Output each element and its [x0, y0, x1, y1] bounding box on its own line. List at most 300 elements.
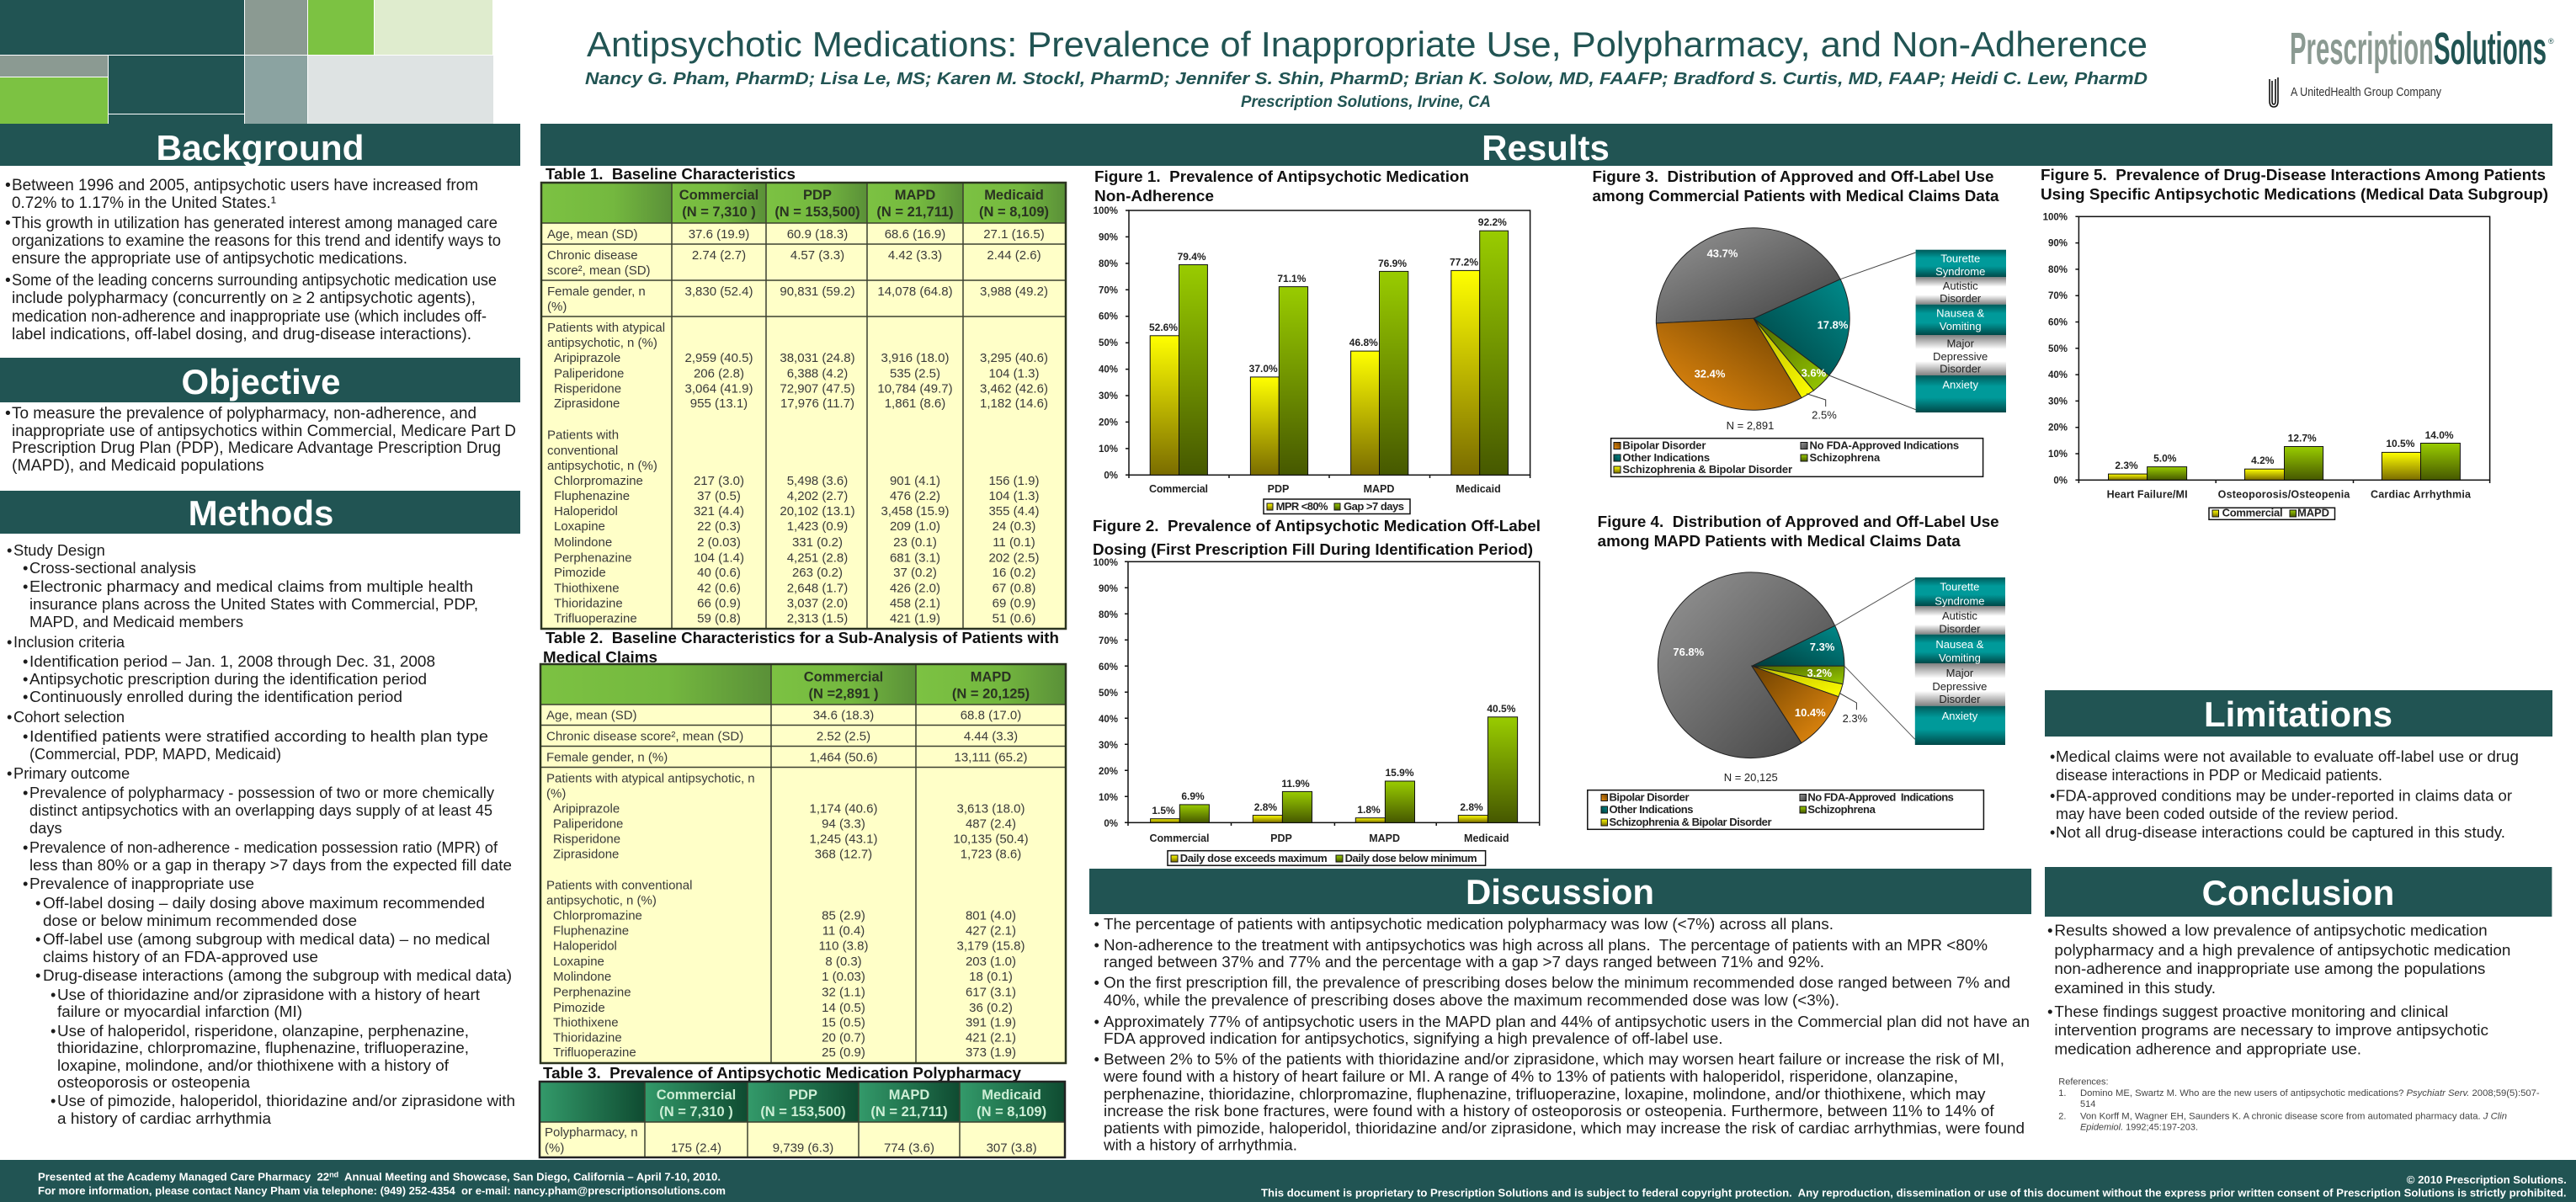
table 2 MAPD column: 421 (2.1): [966, 1031, 1016, 1045]
table 1 title: Table 1. Baseline Characteristics: [546, 165, 796, 183]
text block: discussion: increase the risk bone fractures, were found with a history of osteoporosis or osteopenia. Furthermore, between 11% to 14% of: [1104, 1102, 1995, 1120]
figure 1 title: [1094, 168, 1469, 205]
text block: methods: •: [51, 1092, 56, 1109]
table 1 PDP column: 4,202 (2.7): [787, 489, 848, 503]
text block: limitations: Medical claims were not available to evaluate off-label use or drug: [2056, 748, 2519, 765]
value labels: 5.0%: [2153, 453, 2177, 465]
table 1 PDP column: 20,102 (13.1): [780, 504, 855, 519]
text block: methods: Inclusion criteria: [13, 633, 125, 651]
table 2 commercial column: 25 (0.9): [822, 1045, 865, 1060]
text block: conclusion: Results showed a low prevalence of antipsychotic medication: [2054, 922, 2488, 939]
slice: schizophrenia and bipolar: [1754, 318, 1813, 398]
table 3 header row: PDP: [789, 1088, 817, 1103]
breakout stack: other indications: Tourette: [1940, 253, 1980, 265]
text block: discussion: •: [1094, 1013, 1099, 1030]
y axis labels: 30%: [1099, 741, 1118, 751]
table 1 row labels: Chlorpromazine: [554, 474, 643, 488]
table 2 row labels: Female gender, n (%): [546, 751, 668, 765]
text block: background: Between 1996 and 2005, antipsychotic users have increased from: [12, 176, 478, 194]
table 2 MAPD column: 3,179 (15.8): [957, 939, 1025, 954]
breakout stack: other indications: Disorder: [1939, 623, 1981, 636]
table 3 data row: 9,739 (6.3): [773, 1141, 833, 1155]
table 1 row labels: Patients with: [547, 428, 619, 443]
table 1 commercial column: 2.74 (2.7): [692, 248, 746, 263]
text block: methods: [7, 541, 515, 1127]
value labels: 37.0%: [1249, 363, 1278, 375]
panel: discussion: [1089, 869, 2031, 1154]
slice: schizophrenia: [1752, 666, 1844, 684]
figure 3 title: Figure 3. Distribution of Approved and Off-Label Use: [1593, 168, 1993, 185]
legend: Schizophrenia & Bipolar Disorder: [1610, 816, 1771, 828]
figure 4 title: Figure 4. Distribution of Approved and Off-Label Use: [1598, 513, 1999, 530]
text block: methods: claims history of an FDA-approved use: [43, 948, 318, 965]
category labels: Medicaid: [1464, 832, 1509, 844]
figure 3 title: [1593, 168, 1999, 205]
references: [2058, 1077, 2540, 1133]
text block: discussion: perphenazine, thioridazine, chlorpromazine, fluphenazine, trifluoperazine, loxapine, molindone, and/or thiothixene, which may: [1104, 1085, 1986, 1103]
table 1 row labels: Perphenazine: [554, 550, 632, 565]
table 1 PDP column: 2,648 (1.7): [787, 582, 848, 596]
text block: discussion: patients with pimozide, haloperidol, thioridazine and/or ziprasidone, which may increase the risk of cardiac arrhythmias, were found: [1104, 1120, 2025, 1137]
bars: daily dose exceeds maximum: [1151, 816, 1488, 822]
table 2 commercial column: 34.6 (18.3): [813, 708, 874, 722]
table 3 data row: [545, 1125, 1037, 1155]
text block: conclusion: polypharmacy and a high prevalence of antipsychotic medication: [2054, 941, 2510, 959]
table 2 commercial column: 1 (0.03): [822, 970, 865, 984]
text block: discussion: The percentage of patients with antipsychotic medication polypharmacy was low (<7%) across all plans.: [1104, 915, 1834, 933]
value labels: 92.2%: [1478, 216, 1507, 228]
table 1 MAPD column: 421 (1.9): [890, 611, 940, 626]
table 1 MAPD column: 3,916 (18.0): [881, 351, 949, 365]
breakout stack: other indications: Tourette: [1940, 581, 1979, 593]
breakout stack: other indications: Disorder: [1940, 292, 1982, 305]
table 1 header row: (N = 21,711): [876, 205, 954, 220]
category labels: Heart Failure/MI: [2107, 489, 2188, 501]
text block: methods: Primary outcome: [13, 764, 130, 782]
y axis labels: 40%: [1099, 715, 1118, 725]
bars: MAPD: [2148, 443, 2460, 480]
value labels: 2.8%: [1254, 801, 1277, 813]
table 1 Medicaid column: 104 (1.3): [988, 366, 1040, 380]
panel: background: [0, 124, 520, 343]
table 2 commercial column: 11 (0.4): [822, 924, 865, 939]
table 1 PDP column: 60.9 (18.3): [787, 227, 848, 242]
category labels: Medicaid: [1456, 483, 1501, 495]
legend: Schizophrena: [1807, 803, 1876, 816]
pie labels: 7.3%: [1810, 641, 1835, 653]
table 1 PDP column: 2,313 (1.5): [787, 611, 848, 626]
slice: bipolar disorder: [1656, 318, 1802, 410]
text block: discussion: FDA approved indication for antipsychotics, signifying a high prevalence of off-label use.: [1104, 1029, 1722, 1047]
legend: Gap >7 days: [1344, 500, 1404, 513]
table 1 commercial column: 104 (1.4): [694, 550, 744, 565]
text block: methods: insurance plans across the United States with Commercial, PDP,: [29, 595, 478, 613]
table 2 row labels: Trifluoperazine: [553, 1045, 636, 1060]
legend: MAPD: [2297, 507, 2329, 519]
table 2 MAPD column: 487 (2.4): [966, 816, 1016, 831]
slice: no FDA-approved indications: [1656, 228, 1840, 323]
table 2 header row: MAPD: [971, 669, 1011, 684]
table 1 Medicaid column: 3,462 (42.6): [980, 381, 1048, 396]
value labels: 10.5%: [2386, 438, 2415, 449]
text block: discussion: 40%, while the prevalence of prescribing doses above the maximum recommended dose was low (<3%).: [1104, 992, 1839, 1009]
table 1 row labels: Paliperidone: [554, 366, 624, 380]
bars: commercial: [2108, 452, 2421, 480]
table 1 PDP column: 3,037 (2.0): [787, 597, 848, 611]
heading: background: Background: [157, 128, 364, 168]
table 2 MAPD column: 617 (3.1): [966, 986, 1016, 1000]
legend: Other Indications: [1610, 803, 1694, 816]
table 2 MAPD column: 373 (1.9): [966, 1045, 1016, 1060]
category labels: Cardiac Arrhythmia: [2371, 489, 2472, 501]
table 2 MAPD column: 13,111 (65.2): [954, 751, 1028, 765]
pie labels: 76.8%: [1673, 646, 1705, 658]
y axis labels: [1094, 558, 1118, 829]
pie labels: N = 2,891: [1727, 419, 1774, 432]
category labels: PDP: [1270, 832, 1292, 844]
table 2 MAPD column: [953, 708, 1029, 1060]
text block: methods: Off-label use (among subgroup with medical data) – no medical: [43, 930, 490, 948]
value labels: 2.8%: [1460, 801, 1483, 813]
text block: objective: (MAPD), and Medicaid populations: [12, 456, 264, 475]
table 2 row labels: Perphenazine: [553, 986, 631, 1000]
value labels: 4.2%: [2251, 455, 2275, 466]
table 1 Medicaid column: 16 (0.2): [993, 566, 1035, 580]
text block: discussion: •: [1094, 974, 1099, 992]
slice: no FDA-approved indications: [1658, 572, 1835, 758]
y axis labels: 0%: [1104, 471, 1118, 481]
copyright notice: [1261, 1173, 2567, 1199]
table 2 row labels: Chlorpromazine: [553, 909, 642, 923]
table 1 PDP column: [780, 227, 855, 626]
table 2: sub-analysis baseline characteristics: [540, 664, 1066, 1063]
y axis labels: 60%: [1099, 312, 1118, 322]
table 2 MAPD column: 4.44 (3.3): [964, 730, 1018, 744]
y axis labels: 90%: [1099, 584, 1118, 594]
table 2 MAPD column: 203 (1.0): [966, 955, 1016, 969]
text block: discussion: On the first prescription fill, the prevalence of prescribing doses below the minimum recommended dose ranged between 7% and: [1104, 974, 2010, 992]
text block: methods: Identified patients were stratified according to health plan type: [29, 727, 488, 745]
table 1 Medicaid column: 2.44 (2.6): [987, 248, 1041, 263]
references: Epidemiol. 1992;45:197-203.: [2080, 1123, 2198, 1133]
panel: conclusion: [2045, 867, 2552, 1133]
text block: limitations: FDA-approved conditions may be under-reported in claims data or: [2056, 788, 2512, 805]
figure 5 title: [2041, 166, 2548, 203]
value labels: 77.2%: [1450, 256, 1478, 268]
legend: No FDA-Approved Indications: [1810, 439, 1959, 451]
text block: conclusion: •: [2047, 1003, 2053, 1020]
decorative header mosaic: [0, 0, 493, 124]
category labels: Commercial: [1150, 832, 1209, 844]
table 2 commercial column: 110 (3.8): [819, 939, 868, 954]
value labels: 12.7%: [2288, 433, 2317, 444]
y axis labels: [2043, 212, 2068, 486]
breakout stack: other indications: Syndrome: [1935, 265, 1985, 278]
table 2 row labels: Paliperidone: [553, 816, 623, 831]
breakout stack: other indications: Major: [1946, 338, 1975, 350]
text block: conclusion: These findings suggest proactive monitoring and clinical: [2054, 1003, 2448, 1020]
text block: limitations: disease interactions in PDP or Medicaid patients.: [2056, 767, 2382, 784]
presentation and contact information: Presented at the Academy Managed Care Pharmacy 22: [38, 1171, 326, 1183]
y axis labels: 70%: [2048, 291, 2068, 301]
text block: discussion: Non-adherence to the treatment with antipsychotics was high across all plans. The percentage of patients with an MPR <80%: [1104, 936, 1988, 954]
table 1 commercial column: 40 (0.6): [697, 566, 741, 580]
text block: methods: Prevalence of non-adherence - medication possession ratio (MPR) of: [29, 838, 498, 856]
category labels: MAPD: [1364, 483, 1394, 495]
table 1 header row: MAPD: [895, 188, 935, 203]
title: Antipsychotic Medications: Prevalence of Inappropriate Use, Polypharmacy, and Non-Adherence: [587, 24, 2148, 64]
breakout stack: other indications: Nausea &: [1936, 307, 1985, 320]
y axis labels: 40%: [2048, 370, 2068, 380]
table 2 MAPD column: 391 (1.9): [966, 1015, 1016, 1030]
table 1 row labels: antipsychotic, n (%): [547, 459, 657, 473]
text block: methods: •: [35, 966, 40, 984]
text block: discussion: were found with a history of heart failure or MI. A range of 4% to 13% of patients with haloperidol, risperidone, olanzapine,: [1103, 1067, 1958, 1085]
table 1 commercial column: 3,830 (52.4): [685, 285, 753, 299]
table 1 row labels: Loxapine: [554, 519, 605, 534]
text block: methods: Prevalence of inappropriate use: [29, 875, 254, 892]
heading: objective: Objective: [181, 362, 341, 402]
y axis labels: 90%: [2048, 239, 2068, 249]
table 1 Medicaid column: 51 (0.6): [993, 611, 1035, 626]
table 1 PDP column: 331 (0.2): [792, 535, 843, 550]
panel: objective: [0, 358, 520, 475]
table 1 Medicaid column: 156 (1.9): [988, 474, 1040, 488]
text block: limitations: Not all drug-disease interactions could be captured in this study.: [2056, 824, 2505, 841]
y axis labels: 0%: [1104, 819, 1118, 829]
table 2 title: [543, 629, 1059, 666]
table 2 MAPD column: 36 (0.2): [969, 1001, 1013, 1015]
text block: background: 0.72% to 1.17% in the United States.¹: [12, 194, 277, 212]
table 2 row labels: Thioridazine: [553, 1031, 622, 1045]
table 1 header row: Medicaid: [984, 188, 1044, 203]
text block: methods: •: [23, 688, 28, 705]
text block: methods: MAPD, and Medicaid members: [29, 613, 243, 630]
table 2 row labels: (%): [546, 787, 566, 801]
legend: Schizophrenia & Bipolar Disorder: [1622, 463, 1792, 476]
table 1 Medicaid column: [980, 227, 1048, 626]
figure 2 title: Figure 2. Prevalence of Antipsychotic Medication Off-Label: [1093, 517, 1541, 535]
footer band: [0, 1160, 2576, 1202]
breakout stack: other indications: Depressive: [1932, 680, 1987, 693]
table 3 header row: (N = 8,109): [977, 1104, 1046, 1120]
figure 2 title: Dosing (First Prescription Fill During Identification Period): [1093, 540, 1533, 558]
text block: methods: •: [23, 559, 28, 577]
value labels: 15.9%: [1385, 767, 1414, 779]
legend: [2209, 507, 2335, 519]
table 2 row labels: Aripiprazole: [553, 802, 620, 816]
table 2 MAPD column: 427 (2.1): [966, 924, 1016, 939]
references: 2.: [2058, 1111, 2066, 1121]
table 2 MAPD column: 68.8 (17.0): [961, 708, 1021, 722]
table 3 header row: MAPD: [889, 1088, 929, 1103]
table 3 header row: Medicaid: [982, 1088, 1041, 1103]
y axis labels: 70%: [1099, 285, 1118, 295]
text block: background: •: [5, 271, 11, 290]
table 1 commercial column: 59 (0.8): [697, 611, 741, 626]
table 2 row labels: Age, mean (SD): [546, 708, 637, 722]
table 1 row labels: Pimozide: [554, 566, 606, 580]
table 3 header row: Commercial: [657, 1088, 736, 1103]
pie labels: [1673, 641, 1868, 784]
text block: background: [5, 176, 501, 343]
y axis labels: 80%: [1099, 259, 1118, 269]
table 2 commercial column: 15 (0.5): [822, 1015, 865, 1030]
text block: background: •: [5, 214, 11, 232]
table 1 row labels: score², mean (SD): [547, 263, 651, 278]
value labels: 1.8%: [1357, 804, 1381, 816]
text block: background: include polypharmacy (concurrently on ≥ 2 antipsychotic agents),: [12, 289, 476, 307]
breakout stack: other indications: [1915, 577, 2005, 745]
table 1 row labels: Thiothixene: [554, 582, 620, 596]
table 1 MAPD column: 426 (2.0): [890, 582, 940, 596]
breakout stack: other indications: Anxiety: [1942, 710, 1978, 722]
y axis labels: 40%: [1099, 365, 1118, 375]
legend: [1168, 851, 1486, 865]
affiliation: Prescription Solutions, Irvine, CA: [1241, 93, 1491, 111]
text block: methods: •: [23, 577, 28, 595]
slice: schizophrenia and bipolar: [1752, 666, 1843, 697]
table 1 Medicaid column: 1,182 (14.6): [980, 396, 1048, 411]
text block: methods: •: [7, 764, 12, 782]
table 1 row labels: Chronic disease: [547, 248, 638, 263]
table 1 PDP column: 72,907 (47.5): [780, 381, 855, 396]
pie labels: 2.5%: [1812, 409, 1837, 421]
slice: schizophrenia: [1754, 318, 1829, 391]
table 1 row labels: Age, mean (SD): [547, 227, 638, 242]
pie labels: N = 20,125: [1724, 771, 1778, 784]
pie labels: 10.4%: [1795, 706, 1826, 719]
table 2 row labels: Chronic disease score², mean (SD): [546, 730, 743, 744]
table 1 commercial column: 2 (0.03): [697, 535, 741, 550]
table 1 Medicaid column: 3,988 (49.2): [980, 285, 1048, 299]
y axis labels: 60%: [2048, 318, 2068, 328]
table 2 commercial column: 1,245 (43.1): [810, 832, 877, 846]
text block: methods: days: [29, 819, 62, 837]
table 1 MAPD column: 209 (1.0): [890, 519, 940, 534]
category labels: PDP: [1268, 483, 1289, 495]
references: References:: [2058, 1077, 2109, 1088]
bars: gap over 7 days: [1179, 231, 1509, 475]
logo: Prescription Solutions: ®: [2548, 37, 2554, 45]
text block: methods: •: [23, 727, 28, 745]
table 3 header row: (N = 7,310 ): [659, 1104, 733, 1120]
text block: methods: failure or myocardial infarction (MI): [57, 1003, 302, 1020]
breakout stack: other indications: Syndrome: [1935, 594, 1985, 607]
text block: background: label indications, off-label dosing, and drug-disease interactions).: [12, 325, 471, 343]
text block: methods: thioridazine, chlorpromazine, fluphenazine, trifluoperazine,: [57, 1039, 469, 1056]
text block: discussion: •: [1094, 1050, 1099, 1067]
value labels: [2115, 429, 2454, 471]
table 3 data row: 774 (3.6): [884, 1141, 934, 1155]
table 2 commercial column: 8 (0.3): [825, 955, 862, 969]
text block: methods: •: [7, 541, 12, 559]
text block: background: ensure the appropriate use of antipsychotic medications.: [12, 249, 407, 268]
y axis labels: 70%: [1099, 636, 1118, 646]
table 1 header row: (N = 7,310 ): [682, 205, 756, 220]
pie labels: 2.3%: [1843, 712, 1868, 725]
figure 5 title: Using Specific Antipsychotic Medications (Medical Data Subgroup): [2041, 185, 2548, 203]
text block: background: organizations to examine the reasons for this trend and identify ways to: [12, 231, 501, 250]
breakout stack: other indications: Autistic: [1942, 609, 1977, 622]
table 2 row labels: Patients with atypical antipsychotic, n: [546, 771, 755, 786]
table 2 row labels: Pimozide: [553, 1001, 605, 1015]
figure 5 title: Figure 5. Prevalence of Drug-Disease Interactions Among Patients: [2041, 166, 2546, 183]
table 2 commercial column: 94 (3.3): [822, 816, 865, 831]
references: 1.: [2058, 1088, 2066, 1098]
table 1 row labels: Patients with atypical: [547, 321, 665, 335]
table 1 row labels: Trifluoperazine: [554, 611, 637, 626]
table 1 PDP column: 263 (0.2): [792, 566, 843, 580]
text block: methods: •: [7, 633, 12, 651]
table 1 row labels: conventional: [547, 444, 618, 458]
y axis labels: 50%: [1099, 338, 1118, 348]
y axis labels: 30%: [1099, 391, 1118, 402]
table 2 row labels: Ziprasidone: [553, 847, 619, 862]
table 1 PDP column: 17,976 (11.7): [780, 396, 854, 411]
text block: objective: •: [5, 404, 11, 423]
table 1 MAPD column: 681 (3.1): [890, 550, 940, 565]
text block: discussion: [1094, 915, 2030, 1154]
breakout stack: other indications: Nausea &: [1935, 638, 1984, 651]
text block: objective: Prescription Drug Plan (PDP), Medicare Advantage Prescription Drug: [12, 439, 501, 457]
references: 514: [2080, 1099, 2095, 1109]
table 1 MAPD column: 14,078 (64.8): [877, 285, 953, 299]
value labels: 2.3%: [2115, 460, 2138, 471]
text block: conclusion: [2047, 922, 2510, 1058]
table 1 commercial column: 22 (0.3): [697, 519, 741, 534]
text block: objective: inappropriate use of antipsychotics within Commercial, Medicare Part D: [12, 422, 516, 440]
panel: methods: [0, 491, 520, 1127]
breakout stack: other indications: Major: [1946, 667, 1974, 679]
y axis labels: 30%: [2048, 396, 2068, 407]
table 1 header row: (N = 8,109): [979, 205, 1049, 220]
table 1 MAPD column: 23 (0.1): [893, 535, 937, 550]
table 1 row labels: Aripiprazole: [554, 351, 620, 365]
table 1 header row: (N = 153,500): [774, 205, 860, 220]
text block: methods: Identification period – Jan. 1, 2008 through Dec. 31, 2008: [29, 652, 435, 670]
table 1 MAPD column: 68.6 (16.9): [885, 227, 945, 242]
references: Domino ME, Swartz M. Who are the new users of antipsychotic medications? Psychiatr Serv. 2008;59(5):507-: [2080, 1088, 2540, 1098]
table 1: baseline characteristics: [541, 183, 1066, 629]
legend: Bipolar Disorder: [1610, 791, 1689, 803]
table 2 row labels: Loxapine: [553, 955, 604, 969]
logo: Prescription Solutions: Prescription: [2290, 24, 2434, 74]
bars: daily dose below minimum: [1179, 717, 1518, 822]
table 2 header row: [804, 669, 1030, 702]
text block: limitations: •: [2050, 748, 2055, 765]
figure 1 title: Figure 1. Prevalence of Antipsychotic Medication: [1094, 168, 1469, 185]
value labels: 11.9%: [1281, 778, 1310, 790]
table 2 commercial column: 14 (0.5): [822, 1001, 865, 1015]
text block: methods: •: [51, 1022, 56, 1040]
value labels: 79.4%: [1178, 251, 1206, 263]
table 2 commercial column: [810, 708, 877, 1060]
value labels: 14.0%: [2425, 429, 2454, 441]
table 1 header row: Commercial: [679, 188, 758, 203]
breakout leader lines: [1829, 253, 1916, 410]
text block: methods: Continuously enrolled during the identification period: [29, 688, 402, 705]
y axis labels: 100%: [1094, 558, 1118, 568]
category labels: [2107, 489, 2472, 501]
breakout stack: other indications: Vomiting: [1940, 320, 1982, 332]
slice: other indications: [1752, 625, 1844, 666]
table 2 header row: (N =2,891 ): [808, 687, 879, 702]
table 2 row labels: Fluphenazine: [553, 924, 629, 939]
table 1 MAPD column: 458 (2.1): [890, 597, 940, 611]
category labels: MAPD: [1369, 832, 1400, 844]
bars: MPR under 80 percent: [1150, 270, 1480, 475]
